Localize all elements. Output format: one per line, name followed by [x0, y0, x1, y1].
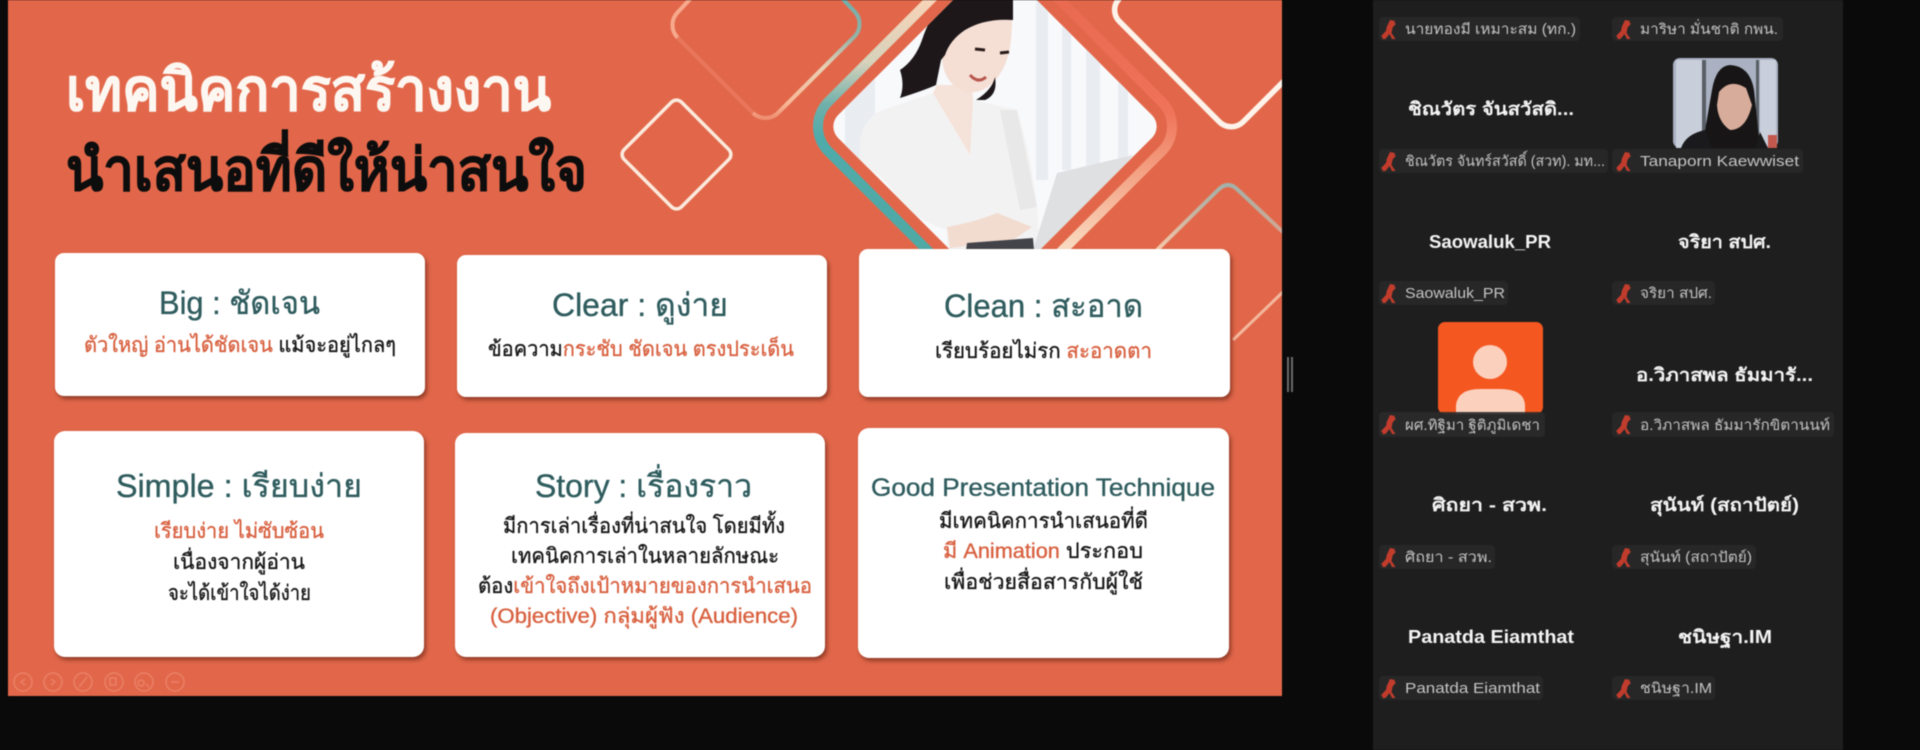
- text: Clear description: ข้อความกระชับ ชัดเจน ตรงประเด็น: [488, 335, 794, 361]
- panel: Story: [455, 433, 825, 657]
- text: Simple description: [154, 519, 324, 605]
- text: Story description: เทคนิคการเล่าในหลายลักษณะ: [511, 544, 779, 568]
- participant: Tanaporn Kaewwiset: Tanaporn Kaewwiset: [1640, 154, 1799, 170]
- participant: จริยา: จริยา สปศ.: [1678, 232, 1771, 252]
- panel: Simple: [54, 431, 424, 657]
- participant: Saowaluk_PR: Saowaluk_PR: [1429, 232, 1551, 252]
- panel divider handle: [1287, 357, 1293, 392]
- panel: Big: [55, 253, 425, 396]
- participant: อ.วิภาสพล: อ.วิภาสพล ธัมมารักขิตานนท์: [1640, 417, 1830, 434]
- participant: จริยา: [1612, 232, 1771, 305]
- participant: ชิณวัตร: ชิณวัตร จันทร์สวัสดิ์ (สวท). มท...: [1405, 150, 1605, 170]
- participant: นายทองมี: [1379, 17, 1580, 41]
- text: Story description: มีการเล่าเรื่องที่น่าสนใจ โดยมีทั้ง: [503, 511, 785, 538]
- participant: Saowaluk_PR: [1379, 232, 1551, 305]
- blouse: [860, 93, 1040, 250]
- heading: Simple: Simple : เรียบง่าย: [116, 468, 362, 504]
- avatar: Tanaporn photo: [1673, 58, 1778, 148]
- participant: ชนิษฐา.IM: [1612, 627, 1772, 700]
- text: Clean description: เรียบร้อยไม่รก สะอาดตา: [935, 339, 1152, 363]
- text: Good Presentation description: มี Animation ประกอบ: [943, 540, 1143, 563]
- participant: จริยา: จริยา สปศ.: [1640, 286, 1712, 302]
- text: Good Presentation description: เพื่อช่วยสื่อสารกับผู้ใช้: [944, 567, 1143, 595]
- slide controls: [14, 673, 184, 691]
- text: Big description: ตัวใหญ่ อ่านได้ชัดเจน แม้จะอยู่ไกลๆ: [84, 333, 396, 358]
- hands and keyboard: [947, 213, 1032, 248]
- participant: ชนิษฐา.IM: ชนิษฐา.IM: [1678, 627, 1772, 649]
- participant: ศิถยา: [1379, 495, 1547, 569]
- hair: [900, 0, 1013, 100]
- decoration: top-right white diamond outline: [1115, 0, 1285, 127]
- laptop: [1033, 155, 1133, 250]
- heading: Clean: Clean : สะอาด: [944, 288, 1143, 324]
- text: Simple description: เรียบง่าย ไม่ซับซ้อน: [154, 519, 324, 543]
- decoration: top-left diamond outline: [672, 0, 860, 118]
- participant: อ.วิภาสพล: อ.วิภาสพล ธัมมารั...: [1636, 365, 1813, 385]
- participant: มาริษา: มาริษา มั่นชาติ กพน.: [1640, 19, 1778, 38]
- participant: Tanaporn Kaewwiset: [1612, 58, 1803, 173]
- participant: อ.วิภาสพล: [1612, 365, 1834, 437]
- participant: มาริษา: [1612, 17, 1783, 41]
- text: Simple description: เนื่องจากผู้อ่าน: [173, 547, 305, 575]
- text: Story description: (Objective) กลุ่มผู้ฟัง (Audience): [490, 605, 798, 629]
- neck and neckline: [933, 85, 973, 155]
- participant: ศิถยา: ศิถยา - สวพ.: [1405, 550, 1492, 566]
- heading: Story: Story : เรื่องราว: [535, 464, 752, 504]
- participant: สุนันท์: สุนันท์ (สถาปัตย์): [1650, 494, 1799, 517]
- decoration: thin peach line: [1233, 290, 1285, 340]
- participant: Panatda Eiamthat: [1379, 627, 1574, 700]
- panel: Clear: [457, 255, 827, 397]
- title: นำเสนอที่ดีให้น่าสนใจ: [66, 129, 587, 203]
- panel: Clean: [859, 249, 1230, 397]
- decoration: photo ring: [818, 0, 1172, 253]
- text: Good Presentation description: มีเทคนิคการนำเสนอที่ดี: [939, 506, 1148, 533]
- participant: ชิณวัตร: [1379, 99, 1608, 173]
- decoration: lower-right diamond outline: [1157, 185, 1285, 250]
- text: Simple description: จะได้เข้าใจได้ง่าย: [168, 581, 311, 605]
- curtain stripes: [845, 0, 1128, 180]
- panel: Good Presentation Technique: [858, 428, 1229, 658]
- decoration: small white diamond outline: [619, 97, 734, 212]
- participant: ชนิษฐา.IM: ชนิษฐา.IM: [1640, 681, 1712, 697]
- participant: ผศ.ทิฐิมา: [1379, 322, 1545, 437]
- participant: สุนันท์: [1612, 494, 1799, 569]
- participant: นายทองมี: นายทองมี เหมาะสม (ทก.): [1405, 21, 1576, 38]
- panel: participants: [1373, 0, 1843, 750]
- text: Story description: [478, 511, 812, 629]
- participant: ผศ.ทิฐิมา: ผศ.ทิฐิมา ฐิติภูมิเดชา: [1405, 418, 1540, 434]
- text: Good Presentation description: [939, 506, 1148, 595]
- heading: Good Presentation Technique: Good Presentation Technique: [871, 474, 1215, 502]
- participant: Panatda Eiamthat: Panatda Eiamthat: [1405, 681, 1540, 697]
- heading: Big: Big : ชัดเจน: [159, 285, 320, 321]
- participant: ศิถยา: ศิถยา - สวพ.: [1432, 495, 1547, 515]
- participant: ชิณวัตร: ชิณวัตร จันสวัสดิ...: [1408, 99, 1574, 119]
- participant: Panatda Eiamthat: Panatda Eiamthat: [1408, 627, 1574, 647]
- text: Story description: ต้องเข้าใจถึงเป้าหมายของการนำเสนอ: [478, 574, 812, 598]
- heading: Clear: Clear : ดูง่าย: [552, 287, 728, 325]
- photo: woman at laptop: [832, 0, 1158, 250]
- title: [66, 58, 587, 203]
- eyes and mouth: [975, 49, 1009, 53]
- face: [942, 19, 1012, 92]
- ear: [931, 32, 943, 56]
- participant: Saowaluk_PR: Saowaluk_PR: [1405, 286, 1505, 302]
- panel: presentation slide: [8, 0, 1285, 696]
- avatar: orange placeholder: [1438, 322, 1543, 414]
- title: เทคนิคการสร้างงาน: [66, 58, 551, 123]
- participant: สุนันท์: สุนันท์ (สถาปัตย์): [1640, 549, 1752, 566]
